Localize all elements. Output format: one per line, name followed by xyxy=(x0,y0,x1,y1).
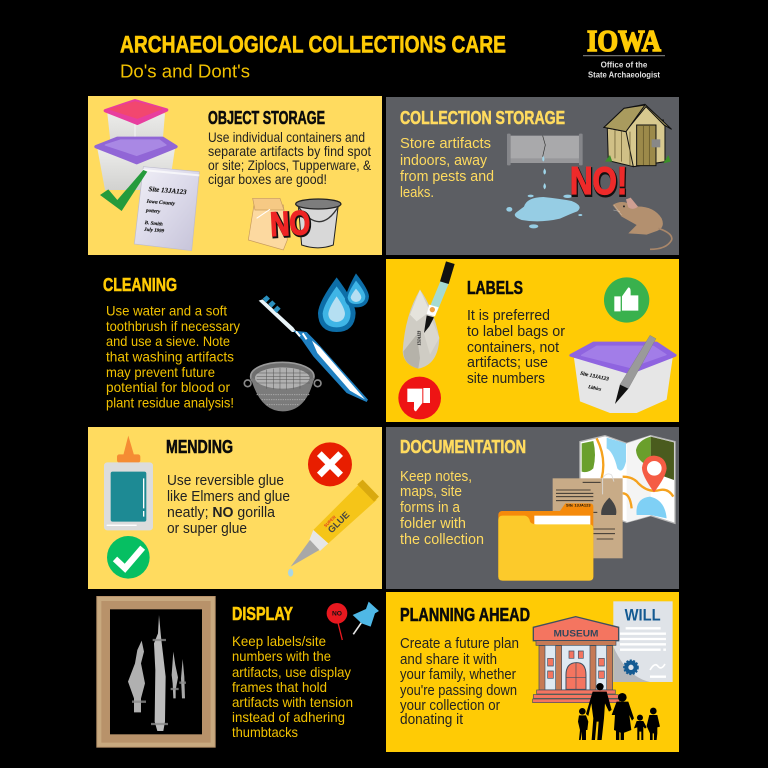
title xyxy=(120,32,506,82)
icon: leaking pipe, shed, NO and mouse: NO! xyxy=(570,159,627,203)
text: labels body: site numbers xyxy=(467,370,545,387)
text: documentation body: folder with xyxy=(400,515,466,532)
panel: mending xyxy=(88,427,382,589)
text: cleaning body: plant residue analysis! xyxy=(106,394,234,410)
heading: collection storage: COLLECTION STORAGE xyxy=(400,108,565,128)
logo: Iowa Office of the State Archaeologist: IOWA xyxy=(587,23,662,58)
text: planning ahead body xyxy=(400,635,519,728)
text: cleaning body: potential for blood or xyxy=(106,379,230,395)
icon: white glue, check, cross and super glue xyxy=(104,436,379,579)
text: planning ahead body: you're passing down xyxy=(400,682,517,699)
icon: stacked containers, bag and check: Iowa County xyxy=(145,199,176,207)
icon: stacked containers, bag and check xyxy=(96,101,341,251)
text: planning ahead body: donating it xyxy=(400,711,464,728)
text: documentation body: forms in a xyxy=(400,499,461,516)
heading: planning ahead: PLANNING AHEAD xyxy=(400,605,530,625)
text: display body: Keep labels/site xyxy=(232,633,326,649)
text: display body: thumbtacks xyxy=(232,724,298,740)
text: cleaning body: that washing artifacts xyxy=(106,348,234,364)
icon: white glue, check, cross and super glue: SUPER xyxy=(323,514,338,528)
text: cleaning body: Use water and a soft xyxy=(106,302,227,318)
icon: map, site form and folder: Site 13JA123 xyxy=(566,502,591,507)
heading: object storage: OBJECT STORAGE xyxy=(208,108,325,128)
text: display body xyxy=(232,633,353,740)
icon: labeled artifact with pen, thumbs and container: 13JA123 xyxy=(416,331,421,345)
panel: display xyxy=(96,596,379,748)
text: object storage body: separate artifacts by find spot xyxy=(208,143,371,159)
text: cleaning body: toothbrush if necessary xyxy=(106,318,240,334)
text: planning ahead body: and share it with xyxy=(400,651,497,668)
icon: water drops, toothbrush and sieve xyxy=(244,273,369,411)
panel: labels xyxy=(386,259,679,422)
text: labels body: artifacts; use xyxy=(467,354,548,371)
text: object storage body: cigar boxes are good! xyxy=(208,171,327,187)
title: Do's and Dont's xyxy=(120,62,250,82)
text: documentation body xyxy=(400,468,484,548)
panel: planning ahead xyxy=(386,592,679,752)
heading: documentation: DOCUMENTATION xyxy=(400,437,526,457)
text: object storage body xyxy=(208,129,372,187)
text: labels body: containers, not xyxy=(467,339,560,356)
text: collection storage body: Store artifacts xyxy=(400,135,491,152)
panel: cleaning xyxy=(103,273,369,411)
text: display body: artifacts, use display xyxy=(232,664,351,680)
text: documentation body: Keep notes, xyxy=(400,468,472,485)
text: mending body: Use reversible glue xyxy=(167,472,284,489)
logo: Iowa Office of the State Archaeologist: Office of the xyxy=(601,61,648,70)
text: display body: instead of adhering xyxy=(232,709,345,725)
text: documentation body: maps, site xyxy=(400,483,462,500)
icon: will document, museum and family xyxy=(533,601,673,740)
text: collection storage body: leaks. xyxy=(400,184,434,201)
logo: Iowa Office of the State Archaeologist xyxy=(583,23,665,79)
heading: labels: LABELS xyxy=(467,278,523,298)
text: labels body xyxy=(467,307,565,387)
icon: stacked containers, bag and check: NO xyxy=(270,205,312,245)
heading: display: DISPLAY xyxy=(232,604,293,624)
text: planning ahead body: Create a future plan xyxy=(400,635,519,652)
icon: will document, museum and family: MUSEUM xyxy=(553,629,598,639)
icon: display frame with points xyxy=(96,596,216,748)
text: display body: frames that hold xyxy=(232,679,327,695)
panel: object storage xyxy=(88,96,382,255)
panel: collection storage xyxy=(386,97,679,255)
text: labels body: to label bags or xyxy=(467,323,565,340)
text: planning ahead body: your collection or xyxy=(400,697,500,714)
panel: documentation xyxy=(386,427,679,589)
text: display body: artifacts with tension xyxy=(232,694,353,710)
icon: stacked containers, bag and check: pottery xyxy=(145,209,161,215)
text: labels body: It is preferred xyxy=(467,307,550,324)
text: collection storage body: from pests and xyxy=(400,168,494,185)
text: mending body: like Elmers and glue xyxy=(167,488,290,505)
text: mending body xyxy=(167,472,290,537)
text: collection storage body: indoors, away xyxy=(400,152,487,169)
text: cleaning body xyxy=(106,302,240,410)
icon: stacked containers, bag and check: Site 13JA123 xyxy=(148,185,187,196)
text: cleaning body: may prevent future xyxy=(106,364,215,380)
text: mending body: neatly; NO gorilla xyxy=(167,504,276,521)
icon: map, site form and folder xyxy=(498,436,675,581)
icon: no thumbtack sign and pin xyxy=(327,602,379,640)
text: object storage body: or site; Ziplocs, Tupperware, & xyxy=(208,157,372,173)
icon: labeled artifact with pen, thumbs and container: Site 13JA123 xyxy=(580,371,610,383)
icon: leaking pipe, shed, NO and mouse: NO! xyxy=(571,160,628,204)
icon: will document, museum and family: WILL xyxy=(625,606,661,625)
text: object storage body: Use individual containers and xyxy=(208,129,365,145)
icon: white glue, check, cross and super glue: GLUE xyxy=(326,510,351,535)
icon: no thumbtack sign and pin: NO xyxy=(332,611,342,618)
icon: stacked containers, bag and check: NO xyxy=(269,204,311,244)
title: ARCHAEOLOGICAL COLLECTIONS CARE xyxy=(120,32,506,58)
heading: cleaning: CLEANING xyxy=(103,275,177,295)
icon: labeled artifact with pen, thumbs and container: Lithics xyxy=(587,385,602,393)
heading: mending: MENDING xyxy=(166,437,233,457)
text: display body: numbers with the xyxy=(232,648,331,664)
icon: stacked containers, bag and check: July 1999 xyxy=(143,228,165,234)
text: planning ahead body: your family, whether xyxy=(400,666,516,683)
text: cleaning body: and use a sieve. Note xyxy=(106,333,230,349)
icon: leaking pipe, shed, NO and mouse xyxy=(506,104,672,249)
text: mending body: or super glue xyxy=(167,520,247,537)
logo: Iowa Office of the State Archaeologist: State Archaeologist xyxy=(588,70,660,79)
text: collection storage body xyxy=(400,135,494,201)
icon: stacked containers, bag and check: B. Smith xyxy=(143,221,163,228)
text: documentation body: the collection xyxy=(400,531,484,548)
icon: labeled artifact with pen, thumbs and container xyxy=(398,261,675,419)
